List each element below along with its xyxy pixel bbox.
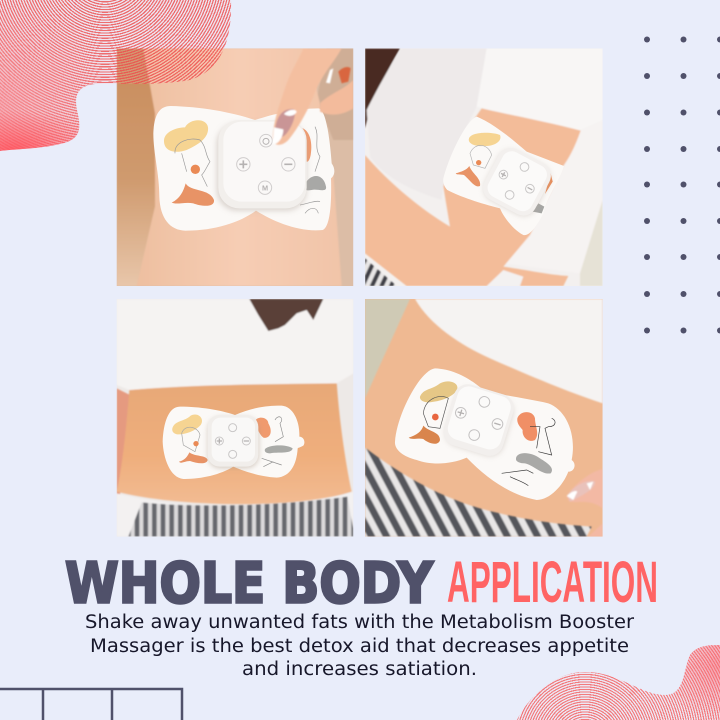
- sticker art: [172, 415, 293, 467]
- photo: patch on thigh: [117, 48, 353, 286]
- device: [482, 148, 552, 218]
- sticker art: [456, 133, 553, 213]
- description text: Massager is the best detox aid that decreases appetite: [90, 636, 629, 657]
- sticker pad: [153, 106, 334, 231]
- device: [208, 415, 258, 468]
- photo: patch on abdomen: [365, 299, 603, 537]
- sticker art: [409, 381, 555, 486]
- wave blob: bottom right: [517, 645, 720, 720]
- device: M: [262, 183, 268, 192]
- device: [444, 384, 515, 458]
- photo: patch on upper arm: [365, 48, 603, 286]
- device: [217, 120, 307, 211]
- dot grid: [644, 36, 720, 334]
- sticker pad: [395, 368, 575, 500]
- photo: patch on lower back: [117, 299, 353, 537]
- sticker art: [164, 120, 326, 213]
- description text: and increases satiation.: [242, 659, 477, 680]
- hand pressing the button: [273, 48, 353, 145]
- sticker pad: [443, 117, 564, 235]
- description text: Shake away unwanted fats with the Metabolism Booster: [85, 612, 634, 633]
- description text: [85, 612, 634, 680]
- title: WHOLE BODY: [65, 552, 434, 616]
- grid outline decoration: [0, 689, 182, 720]
- wave blob: top left: [0, 0, 232, 152]
- sticker pad: [163, 406, 304, 479]
